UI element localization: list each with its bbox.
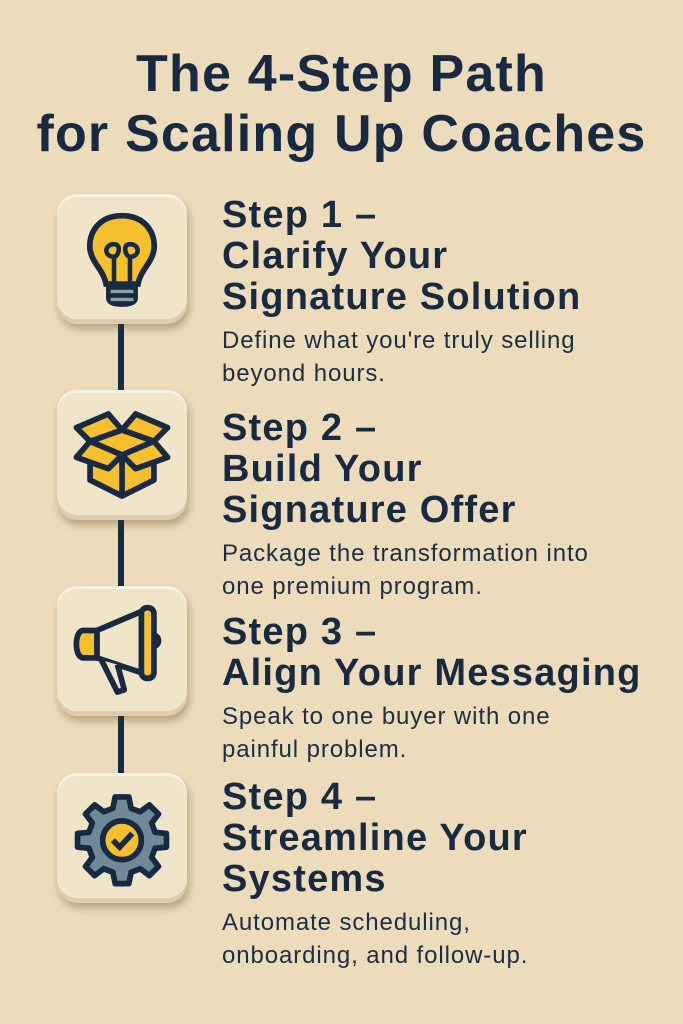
step 4 text: Streamline Your — [222, 817, 528, 859]
connector line 3 — [118, 715, 124, 775]
step 4 text — [222, 776, 528, 969]
step 4 text: onboarding, and follow-up. — [222, 942, 528, 969]
icon: megaphone — [57, 586, 187, 716]
title: for Scaling Up Coaches — [36, 105, 647, 163]
icon: box — [57, 390, 187, 520]
step 2 text: one premium program. — [222, 573, 483, 600]
step 3 text: Speak to one buyer with one — [222, 703, 551, 730]
step 1 text: Signature Solution — [222, 276, 581, 318]
step 2 text — [222, 407, 589, 600]
icon: light bulb — [57, 194, 187, 324]
step 3 text: Step 3 – — [222, 611, 377, 653]
step 1 text: beyond hours. — [222, 360, 386, 387]
step 3 text: painful problem. — [222, 736, 407, 763]
step 2 text: Signature Offer — [222, 489, 517, 531]
step 2 text: Build Your — [222, 448, 423, 490]
step 2 text: Step 2 – — [222, 407, 377, 449]
step 1 text: Define what you're truly selling — [222, 327, 576, 354]
title: The 4-Step Path — [136, 45, 547, 103]
icon: gear check — [57, 773, 187, 903]
step 1 text: Clarify Your — [222, 235, 448, 277]
step 4 text: Systems — [222, 858, 387, 900]
step 2 text: Package the transformation into — [222, 540, 589, 567]
step 1 text: Step 1 – — [222, 194, 377, 236]
step 4 text: Step 4 – — [222, 776, 377, 818]
step 3 text: Align Your Messaging — [222, 652, 642, 694]
connector line 2 — [118, 519, 124, 587]
step 1 text — [222, 194, 581, 387]
step 4 text: Automate scheduling, — [222, 909, 471, 936]
connector line 1 — [118, 323, 124, 391]
title — [36, 45, 647, 163]
step 3 text — [222, 611, 642, 763]
